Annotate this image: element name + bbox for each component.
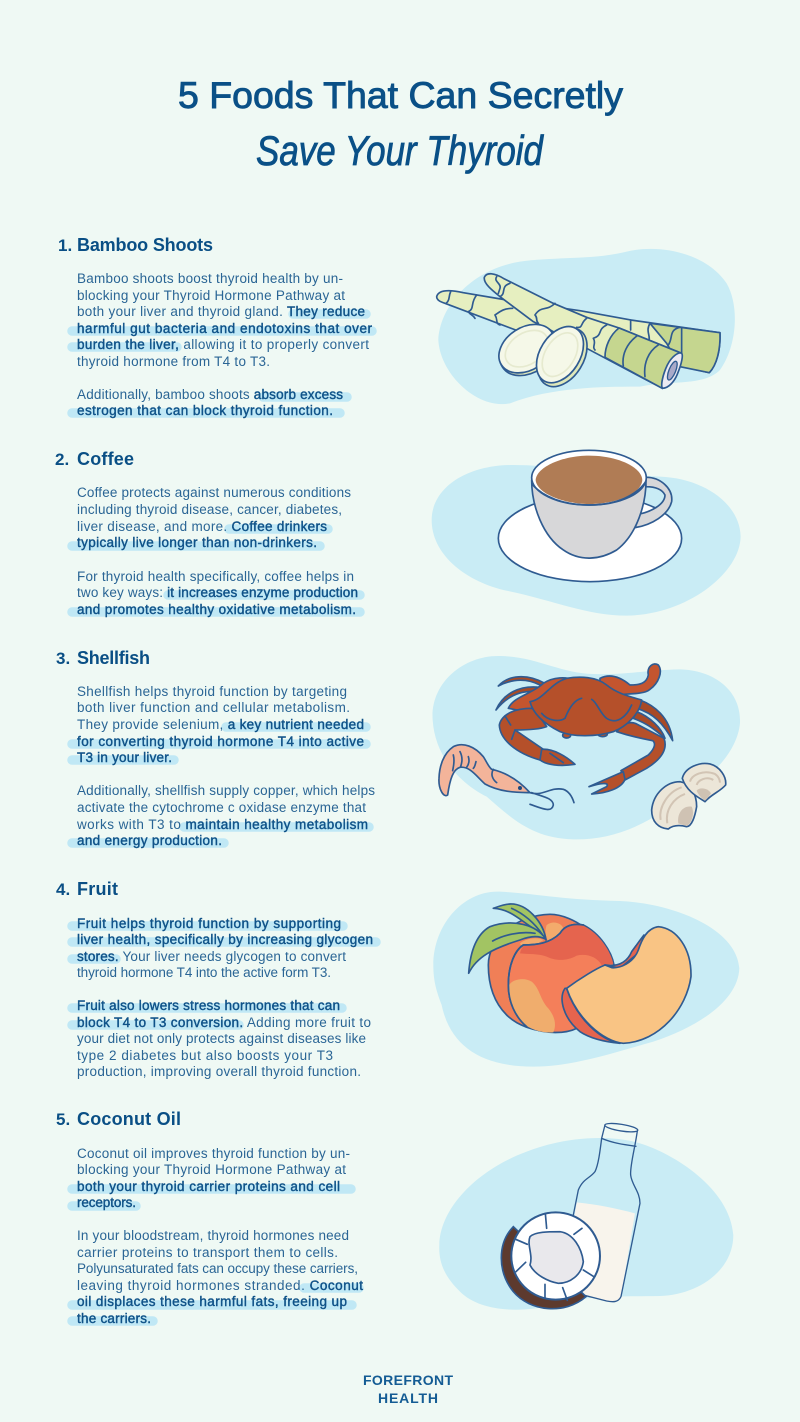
text block: shellfish: for converting thyroid hormone T4 into active [77,734,364,749]
text block: coconut oil: Coconut oil improves thyroid function by un- [77,1146,350,1161]
text block: fruit: Fruit helps thyroid function by supporting [77,916,341,931]
text block: bamboo shoots: burden the liver, allowing it to properly convert [77,337,369,352]
text block: bamboo shoots: both your liver and thyroid gland. They reduce [77,304,365,319]
heading: coconut oil: Coconut Oil [77,1109,181,1129]
text block: coffee: including thyroid disease, cancer, diabetes, [77,502,342,517]
text block: bamboo shoots [72,271,372,418]
text block: shellfish: T3 in your liver. [77,750,172,765]
panel: bamboo shoots [58,235,735,418]
text block: fruit: stores. Your liver needs glycogen to convert [77,949,346,964]
text block: fruit: liver health, specifically by increasing glycogen [77,932,373,947]
text block: coconut oil: both your thyroid carrier proteins and cell [77,1179,340,1194]
text block: shellfish: They provide selenium, a key nutrient needed [77,717,364,732]
title [178,75,623,174]
panel: shellfish [56,648,740,848]
text block: shellfish [72,684,375,848]
text block: shellfish: Shellfish helps thyroid function by targeting [77,684,347,699]
panel: fruit [56,879,739,1079]
text block: coconut oil: blocking your Thyroid Hormone Pathway at [77,1162,346,1177]
icon: coconut and oil bottle [439,1122,733,1310]
text block: fruit: production, improving overall thyroid function. [77,1064,361,1079]
heading: fruit: Fruit [77,879,118,899]
text block: fruit: block T4 to T3 conversion. Adding more fruit to [77,1015,371,1030]
text block: coffee [72,485,360,617]
text block: coffee: Coffee protects against numerous conditions [77,485,351,500]
icon: coffee cup [432,450,741,616]
text block: coffee: and promotes healthy oxidative metabolism. [77,602,356,617]
text block: fruit: Fruit also lowers stress hormones that can [77,998,340,1013]
text block: fruit: type 2 diabetes but also boosts your T3 [77,1048,333,1063]
text block: coffee: liver disease, and more. Coffee drinkers [77,519,327,534]
icon: bamboo shoots [437,249,735,404]
title: Save Your Thyroid [256,127,544,174]
heading: coffee: Coffee [77,449,134,469]
text block: bamboo shoots: Additionally, bamboo shoots absorb excess [77,387,343,402]
text block: coconut oil: leaving thyroid hormones stranded. Coconut [77,1278,363,1293]
text block: shellfish: works with T3 to maintain healthy metabolism [76,817,368,832]
panel: coconut oil [56,1109,733,1326]
heading: bamboo shoots: Bamboo Shoots [77,235,213,255]
heading: shellfish: 3. [56,649,70,668]
text block: coconut oil: In your bloodstream, thyroid hormones need [77,1228,349,1243]
text block: coffee: two key ways: it increases enzyme production [77,585,358,600]
icon: peach [433,892,739,1067]
text block: coconut oil: the carriers. [77,1311,151,1326]
text block: coconut oil: Polyunsaturated fats can occupy these carriers, [77,1261,358,1276]
text block: bamboo shoots: blocking your Thyroid Hormone Pathway at [77,288,345,303]
text block: bamboo shoots: Bamboo shoots boost thyroid health by un- [77,271,343,286]
text block: coconut oil: oil displaces these harmful fats, freeing up [77,1294,347,1309]
heading: coconut oil: 5. [56,1110,70,1129]
logo [363,1372,453,1406]
text block: shellfish: Additionally, shellfish supply copper, which helps [77,783,375,798]
heading: shellfish: Shellfish [77,648,150,668]
heading: coffee: 2. [55,450,69,469]
text block: bamboo shoots: thyroid hormone from T4 to T3. [77,354,270,369]
text block: coffee: typically live longer than non-drinkers. [77,535,317,550]
text block: fruit [72,916,376,1079]
text block: bamboo shoots: harmful gut bacteria and endotoxins that over [77,321,372,336]
text block: bamboo shoots: estrogen that can block thyroid function. [77,403,333,418]
logo: FOREFRONT [363,1372,453,1388]
text block: coffee: For thyroid health specifically, coffee helps in [77,569,354,584]
heading: fruit: 4. [56,880,70,899]
text block: shellfish: activate the cytochrome c oxidase enzyme that [77,800,366,815]
heading: bamboo shoots: 1. [58,236,72,255]
text block: fruit: thyroid hormone T4 into the active form T3. [77,965,331,980]
logo: HEALTH [378,1390,438,1406]
text block: fruit: your diet not only protects against diseases like [77,1031,366,1046]
title: 5 Foods That Can Secretly [178,75,623,116]
panel: coffee [55,449,741,617]
text block: shellfish: both liver function and cellular metabolism. [77,700,350,715]
icon: crab, shrimp and clams [433,656,740,839]
text block: coconut oil [72,1146,363,1326]
text block: coconut oil: carrier proteins to transport them to cells. [77,1245,338,1260]
text block: shellfish: and energy production. [77,833,222,848]
text block: coconut oil: receptors. [77,1195,136,1210]
